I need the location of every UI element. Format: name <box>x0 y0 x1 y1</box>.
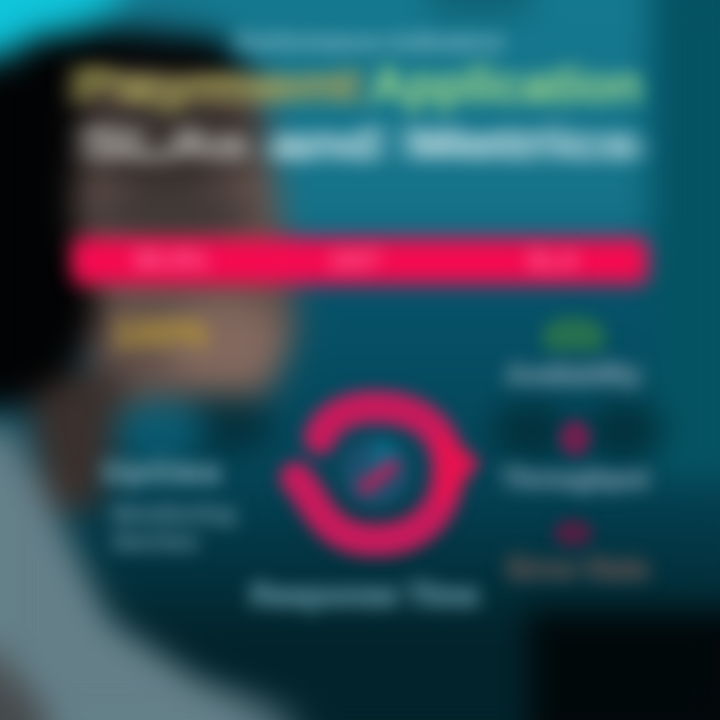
gauge inner dial <box>342 439 410 507</box>
title <box>56 54 656 173</box>
left metric text <box>106 497 243 559</box>
gauge arrowhead right <box>436 425 480 515</box>
neck <box>20 370 130 510</box>
metric two label: Throughput <box>502 463 648 493</box>
title line 2 <box>66 114 656 173</box>
title word: SLAs: SLAs <box>80 117 251 169</box>
left metric text: Monitoring <box>113 501 237 526</box>
shirt <box>0 420 310 720</box>
left metric text: Service <box>113 529 198 554</box>
left stat heading: 100% <box>112 313 209 355</box>
icon: green marker <box>543 317 605 351</box>
left metric title: Uptime <box>103 456 223 489</box>
face <box>70 70 298 410</box>
panel: right metrics <box>495 312 657 590</box>
hair <box>0 28 262 410</box>
red banner <box>55 221 665 301</box>
gauge caption: Response Time <box>250 577 479 612</box>
metric three label: Error Rate <box>507 553 649 585</box>
gauge ring <box>296 407 448 540</box>
title line 1 <box>56 54 652 122</box>
title word: Metrics: Metrics <box>405 117 640 169</box>
title word: Application: Application <box>370 57 642 113</box>
gauge icon <box>268 378 489 569</box>
banner label: middle: 24/7 <box>330 245 381 275</box>
panel: left metric <box>93 452 243 559</box>
eyebrow text: Performance Indicators <box>236 29 504 56</box>
metric one label: Availability <box>505 359 641 389</box>
title word: and: and <box>270 117 382 169</box>
icon: dark red marker <box>553 519 593 547</box>
banner label: left: 99.9% <box>134 245 208 275</box>
banner label: right: SLA <box>527 245 579 275</box>
dark halo behind left stat <box>155 395 275 455</box>
gauge needle <box>364 466 392 488</box>
icon: red marker <box>559 420 591 456</box>
banner bar <box>72 238 648 284</box>
title word: Payment: Payment <box>72 57 362 113</box>
dark halo behind right stats <box>490 402 570 458</box>
